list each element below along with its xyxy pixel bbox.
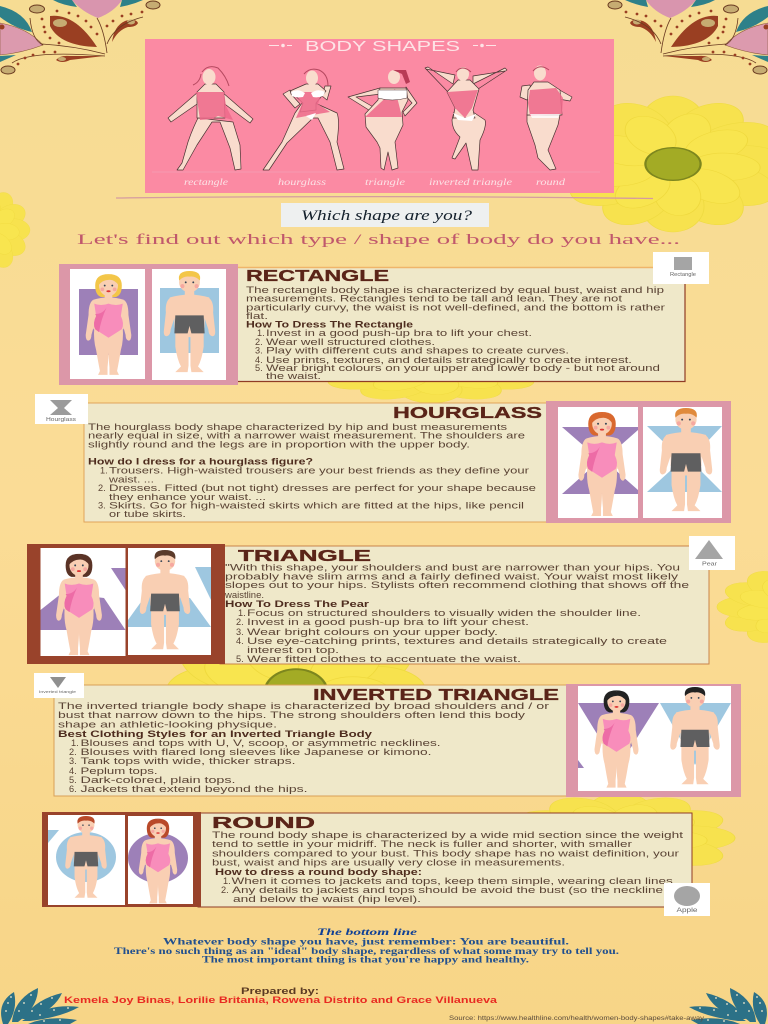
icon: apple: Apple xyxy=(676,908,698,914)
icon: hourglass: Hourglass xyxy=(46,417,77,423)
triangle photo frame xyxy=(27,544,225,664)
inverted triangle text card: 5. xyxy=(69,775,77,785)
hourglass text card: slightly round and the legs are in proportion with the upper body. xyxy=(88,440,470,450)
panel: triangle xyxy=(27,544,709,664)
inverted triangle text card: INVERTED TRIANGLE xyxy=(313,687,559,704)
triangle text card xyxy=(220,546,709,664)
round text card: ROUND xyxy=(212,815,315,832)
banner labels: round xyxy=(536,178,565,188)
banner heading: BODY SHAPES xyxy=(305,38,460,55)
text block: the bottom line: Whatever body shape you have, just remember: You are beautiful. xyxy=(163,938,569,948)
flower: behind round panel xyxy=(505,793,735,883)
triangle text card: TRIANGLE xyxy=(238,548,371,565)
flower: behind rectangle panel xyxy=(316,333,546,403)
figure: hourglass xyxy=(263,69,344,170)
icon: inverted triangle: Inverted triangle xyxy=(39,689,77,694)
credits: prepared by xyxy=(64,986,498,1006)
hourglass text card: waist. ... xyxy=(108,474,154,484)
flower: behind triangle panel xyxy=(166,597,426,787)
round text card: When it comes to jackets and tops, keep them simple, wearing clean lines. xyxy=(232,876,676,886)
rectangle text card: 5. xyxy=(255,363,263,373)
triangle text card: waistline. xyxy=(224,590,264,600)
rectangle text card: the waist. xyxy=(266,371,321,381)
subtitle: Let's find out which type / shape of body do you have... xyxy=(77,232,680,248)
round text card: 2. xyxy=(221,885,229,895)
figure: inverted triangle xyxy=(425,67,507,170)
hourglass text card: Dresses. Fitted (but not tight) dresses are perfect for your shape because xyxy=(109,483,536,493)
callout: which shape are you: Which shape are you? xyxy=(301,208,473,224)
hourglass text card: or tube skirts. xyxy=(109,509,186,519)
icon: rectangle: Rectangle xyxy=(670,272,696,278)
rectangle text card: flat. xyxy=(246,311,268,321)
text block: the bottom line: The most important thing is that you're happy and healthy. xyxy=(202,954,529,964)
inverted triangle text card: Tank tops with wide, thicker straps. xyxy=(80,756,296,766)
triangle text card: Focus on structured shoulders to visually widen the shoulder line. xyxy=(247,608,641,618)
icon: inverted triangle xyxy=(34,673,84,698)
rectangle text card: 4. xyxy=(255,355,263,365)
inverted triangle text card: Blouses and tops with U, V, scoop, or asymmetric necklines. xyxy=(80,738,440,748)
hourglass text card: 3. xyxy=(98,500,106,510)
triangle text card: 4. xyxy=(236,636,244,646)
rectangle text card: 3. xyxy=(255,346,263,356)
triangle text card: Wear bright colours on your upper body. xyxy=(247,627,498,637)
round text card: bust, waist and hips are usually very close in measurements. xyxy=(212,858,565,868)
flower: left edge xyxy=(0,188,30,272)
hourglass text card: How do I dress for a hourglass figure? xyxy=(88,457,314,467)
rectangle text card: 2. xyxy=(255,337,263,347)
triangle text card: How To Dress The Pear xyxy=(225,599,370,609)
ornament: top left xyxy=(0,0,160,74)
triangle text card: Use eye-catching prints, textures and details strategically to create xyxy=(247,636,667,646)
inverted triangle text card: Best Clothing Styles for an Inverted Triangle Body xyxy=(58,729,373,739)
inverted triangle text card: Jackets that extend beyond the hips. xyxy=(80,784,308,794)
round text card: and below the waist (hip level). xyxy=(233,894,421,904)
hourglass text card: HOURGLASS xyxy=(393,405,542,422)
banner heading xyxy=(269,38,496,55)
figure: rectangle xyxy=(168,67,253,170)
inverted triangle text card: Peplum tops. xyxy=(80,766,158,776)
rectangle text card: Play with different cuts and shapes to create curves. xyxy=(266,346,569,356)
banner labels: inverted triangle xyxy=(429,178,512,188)
inverted triangle photo frame xyxy=(566,684,741,797)
hourglass text card: The hourglass body shape characterized by hip and bust measurements xyxy=(88,422,508,432)
round text card: Any details to jackets and tops should be avoid the bust (so the neckline xyxy=(232,885,663,895)
panel: hourglass xyxy=(84,401,731,523)
icon: pear: Pear xyxy=(702,562,717,568)
credits: prepared by: Kemela Joy Binas, Lorilie Britania, Rowena Distrito and Grace Villanueva xyxy=(64,995,498,1006)
round text card: tend to settle in your midriff. The neck is fuller and shorter, with smaller xyxy=(212,839,632,849)
inverted triangle text card xyxy=(54,685,570,796)
triangle text card: 2. xyxy=(236,617,244,627)
callout: which shape are you xyxy=(281,203,489,227)
banner labels xyxy=(184,178,565,188)
banner labels: triangle xyxy=(365,178,405,188)
triangle text card: 3. xyxy=(236,627,244,637)
panel: inverted triangle xyxy=(54,684,741,797)
rectangle text card: 1. xyxy=(257,328,265,338)
panel: round xyxy=(42,812,692,907)
inverted triangle text card: The inverted triangle body shape is characterized by broad shoulders and / or xyxy=(58,701,549,711)
round text card: The round body shape is characterized by a wide mid section since the weight xyxy=(212,830,684,840)
inverted triangle text card: shape an athletic-looking physique. xyxy=(58,720,277,730)
panel: rectangle xyxy=(59,264,685,385)
hourglass text card: Skirts. Go for high-waisted skirts which are fitted at the hips, like pencil xyxy=(109,500,524,510)
round text card xyxy=(198,813,692,907)
triangle text card: "With this shape, your shoulders and bust are narrower than your hips. You xyxy=(225,562,680,572)
hourglass text card: Trousers. High-waisted trousers are your best friends as they define your xyxy=(109,466,529,476)
triangle text card: slopes out to your hips. Stylists often recommend clothing that shows off the xyxy=(225,580,689,590)
triangle text card: Invest in a good push-up bra to lift your chest. xyxy=(247,617,529,627)
inverted triangle text card: 2. xyxy=(69,747,77,757)
text block: the bottom line: There's no such thing as an "ideal" body shape, regardless of what some may try to tell you. xyxy=(114,946,619,956)
triangle text card: 5. xyxy=(236,654,244,664)
hourglass text card: 1. xyxy=(100,466,108,476)
figure: round xyxy=(520,66,572,170)
rectangle text card: RECTANGLE xyxy=(246,268,389,285)
banner: body shapes xyxy=(145,38,614,193)
text block: the bottom line xyxy=(114,928,619,964)
credits: prepared by: Prepared by: xyxy=(241,986,319,997)
rectangle text card: The rectangle body shape is characterized by equal bust, waist and hip xyxy=(246,285,664,295)
inverted triangle text card: Dark-colored, plain tops. xyxy=(80,775,236,785)
icon: hourglass xyxy=(35,394,88,424)
round text card: 1. xyxy=(223,876,231,886)
banner labels: hourglass xyxy=(278,178,326,188)
flower: right edge xyxy=(717,567,768,647)
rectangle text card: particularly curvy, the waist is not well-defined, and the bottom is rather xyxy=(246,302,665,312)
inverted triangle text card: bust that narrow down to the hips. The strong shoulders often lend this body xyxy=(58,710,526,720)
hourglass text card: nearly equal in size, with a narrower waist measurement. The shoulders are xyxy=(88,431,525,441)
inverted triangle text card: Blouses with flared long sleeves like Japanese or kimono. xyxy=(80,747,432,757)
figure: triangle xyxy=(348,70,417,170)
round text card: shoulders compared to your bust. This body shape has no waist definition, your xyxy=(212,848,679,858)
inverted triangle text card: 4. xyxy=(69,766,77,776)
icon: rectangle xyxy=(653,252,709,284)
hourglass text card: they enhance your waist. ... xyxy=(109,492,266,502)
hourglass text card: 2. xyxy=(98,483,106,493)
hourglass photo frame xyxy=(546,401,731,523)
rectangle text card: Wear bright colours on your upper and lower body - but not around xyxy=(266,363,660,373)
flower: top right xyxy=(558,96,768,232)
ornament: top right xyxy=(608,0,768,74)
triangle text card: Wear fitted clothes to accentuate the waist. xyxy=(247,654,521,664)
inverted triangle text card: 3. xyxy=(69,756,77,766)
round text card: How to dress a round body shape: xyxy=(215,867,422,877)
rectangle text card: Invest in a good push-up bra to lift your chest. xyxy=(266,328,532,338)
icon: pear xyxy=(689,536,735,570)
triangle text card: 1. xyxy=(238,608,246,618)
leaves: bottom right xyxy=(689,988,767,1024)
hourglass text card xyxy=(84,403,554,522)
rectangle text card: Wear well structured clothes. xyxy=(266,337,435,347)
rectangle text card: How To Dress The Rectangle xyxy=(246,320,413,330)
banner labels: rectangle xyxy=(184,178,228,188)
rectangle text card xyxy=(230,268,685,382)
text block: the bottom line: The bottom line xyxy=(317,928,418,938)
leaves: bottom left xyxy=(1,988,79,1024)
rectangle text card: Use prints, textures, and details strategically to create interest. xyxy=(266,355,632,365)
source: Source: https://www.healthline.com/health/women-body-shapes#take-away xyxy=(449,1015,705,1022)
icon: apple xyxy=(664,883,710,916)
rectangle text card: measurements. Rectangles tend to be tall and lean. They are not xyxy=(246,294,623,304)
inverted triangle text card: 6. xyxy=(69,784,77,794)
rectangle photo frame xyxy=(59,264,238,385)
triangle text card: probably have slim arms and a fairly defined waist. Your waist most likely xyxy=(225,571,679,581)
triangle text card: interest on top. xyxy=(247,645,339,655)
inverted triangle text card: 1. xyxy=(71,738,79,748)
round photo frame xyxy=(42,812,201,907)
